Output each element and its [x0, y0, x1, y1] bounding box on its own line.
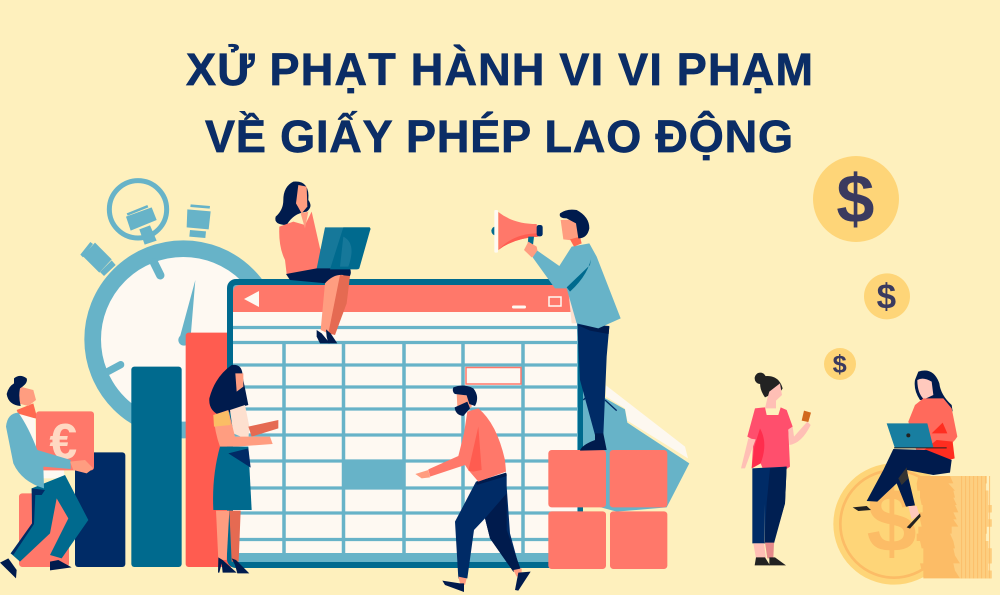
icon: gold coin and stack: $	[867, 472, 917, 572]
title: XỬ PHẠT HÀNH VI VI PHẠM	[186, 44, 813, 95]
person: man carrying euro box	[0, 376, 94, 578]
person: woman sitting with laptop	[275, 182, 370, 343]
red blocks	[548, 450, 667, 569]
laptop screen end	[330, 227, 371, 269]
person: woman with skirt	[209, 365, 278, 573]
icon: large dollar coin: $	[836, 162, 874, 238]
person: standing woman with card	[741, 373, 811, 565]
icon: megaphone	[491, 210, 543, 253]
person: woman with laptop sitting on coins	[853, 371, 957, 529]
window buttons	[512, 297, 561, 308]
grid lines	[233, 328, 577, 553]
window title bar	[233, 285, 574, 312]
person: walking bearded man	[415, 386, 531, 592]
folder behind the blocks	[580, 385, 689, 512]
title: VỀ GIẤY PHÉP LAO ĐỘNG	[205, 111, 793, 162]
coins group	[813, 156, 910, 380]
bar chart	[19, 333, 239, 567]
icon: medium dollar coin: $	[877, 277, 896, 316]
spreadsheet window	[227, 279, 583, 568]
icon: large dollar coin	[813, 156, 899, 242]
icon: medium dollar coin	[864, 273, 910, 319]
highlighted teal cell	[345, 460, 404, 489]
icon: small dollar coin	[824, 348, 856, 380]
icon: stopwatch	[80, 181, 274, 430]
title	[186, 44, 813, 162]
person: man with megaphone	[491, 210, 621, 451]
icon: small dollar coin: $	[833, 351, 847, 379]
icon: euro box: €	[49, 414, 77, 470]
back arrow	[244, 291, 259, 307]
icon: gold coin and stack	[833, 463, 992, 585]
icon: euro box	[36, 411, 94, 470]
highlighted outlined cell	[466, 368, 521, 384]
